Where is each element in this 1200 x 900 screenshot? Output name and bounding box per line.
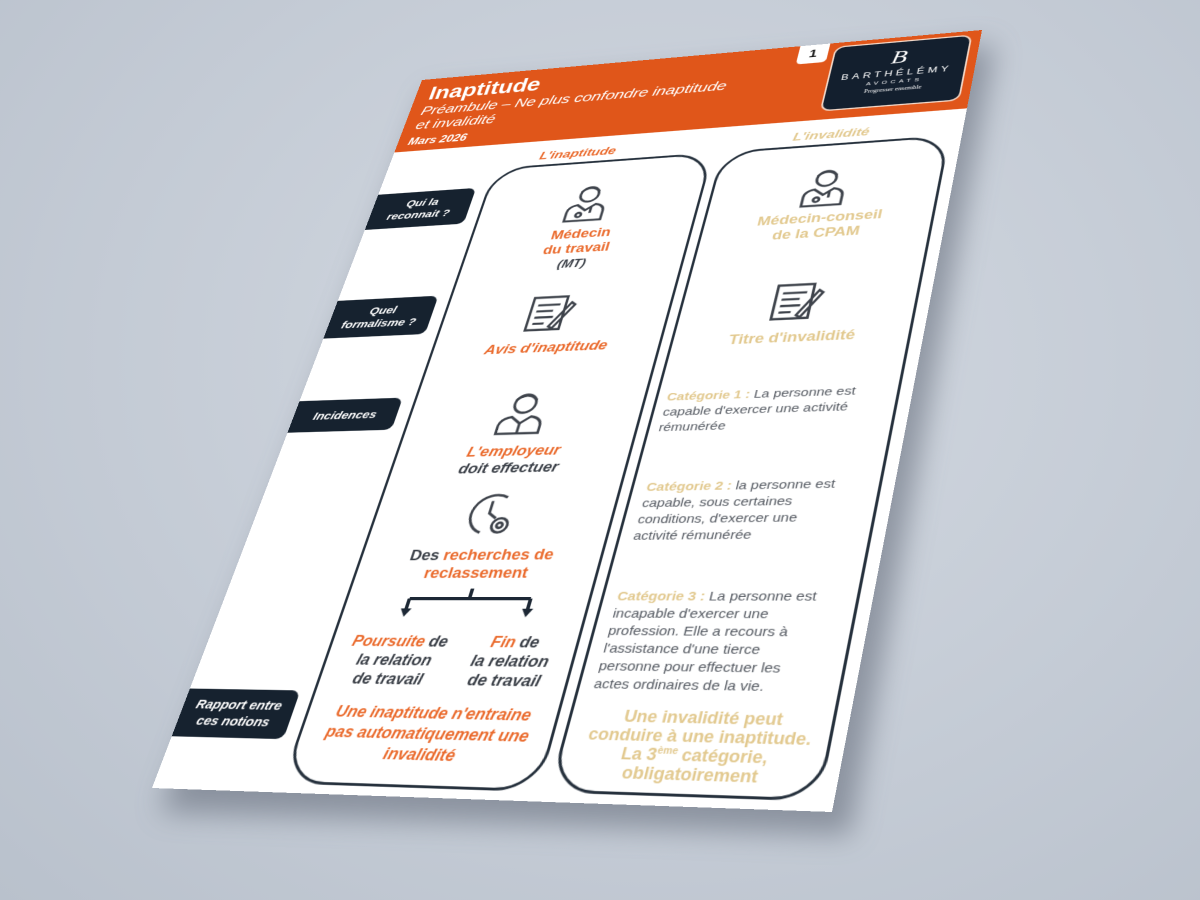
text: rapport inaptitude: invalidité — [381, 745, 458, 765]
panel: inaptitude column — [282, 152, 714, 792]
text: rapport invalidite: La 3ème catégorie, — [619, 744, 770, 767]
label: incidences: Incidences — [311, 408, 379, 422]
column title: inaptitude: L'inaptitude — [538, 144, 618, 162]
text: categorie 3: profession. Elle a recours à — [606, 624, 789, 640]
label: qui la reconnait — [365, 188, 476, 230]
text: fin — [465, 633, 551, 690]
icon: form — [768, 282, 826, 321]
label: quel formalisme: Quel — [368, 304, 398, 317]
text: rapport invalidite: conduire à une inaptitude. — [586, 725, 813, 749]
text: poursuite: Poursuite de — [350, 632, 451, 650]
text: fin: la relation — [469, 652, 551, 670]
text: medecin-conseil: de la CPAM — [771, 223, 861, 242]
text: categorie 3: actes ordinaires de la vie. — [592, 676, 766, 695]
logo: Progresser ensemble — [863, 84, 922, 94]
text: rapport inaptitude: pas automatiquement une — [323, 722, 531, 745]
label: incidences — [287, 398, 403, 433]
text: categorie 2: activité rémunérée — [632, 528, 753, 543]
text: poursuite — [350, 632, 451, 688]
label: rapport: ces notions — [194, 714, 272, 730]
text: categorie 3 — [566, 589, 818, 781]
text: rapport invalidite: obligatoirement — [620, 763, 760, 786]
text: medecin-conseil: Médecin-conseil — [756, 207, 884, 228]
label: qui la reconnait: reconnait ? — [385, 208, 451, 222]
text: medecin du travail: du travail — [541, 240, 612, 257]
text: recherches de reclassement: reclassement — [422, 564, 530, 581]
title: Inaptitude — [426, 74, 544, 104]
text: recherches de reclassement: Des recherches de — [408, 546, 556, 563]
text: categorie 3: incapable d'exercer une — [611, 606, 770, 622]
text: categorie 1: rémunérée — [657, 419, 727, 434]
text: categorie 1 — [657, 384, 857, 434]
logo: B — [889, 46, 910, 68]
text: l'employeur doit effectuer: doit effectuer — [456, 459, 561, 477]
text: rapport inaptitude: Une inaptitude n'entraine — [334, 702, 534, 724]
text: categorie 3: personne pour effectuer les — [597, 659, 782, 676]
icon: employer — [493, 393, 542, 436]
subtitle: Préambule – Ne plus confondre inaptitude — [419, 79, 729, 118]
header band — [394, 30, 982, 152]
text: l'employeur doit effectuer — [456, 442, 562, 477]
text: titre d'invalidite: Titre d'invalidité — [727, 327, 857, 347]
text: categorie 3: Catégorie 3 : La personne est — [616, 589, 818, 604]
text: categorie 2: conditions, d'exercer une — [636, 511, 799, 527]
column title: invalidite: L'invalidité — [792, 125, 871, 143]
text: medecin du travail: (MT) — [556, 258, 587, 271]
text: categorie 3: l'assistance d'une tierce — [602, 641, 762, 658]
text: rapport inaptitude — [322, 702, 534, 765]
panel: invalidite column — [548, 135, 950, 801]
logo: AVOCATS — [865, 76, 923, 87]
icon: doctor — [798, 170, 844, 208]
text: poursuite: la relation — [354, 651, 434, 669]
arrow: split bracket — [400, 588, 534, 618]
label: quel formalisme — [323, 296, 438, 339]
page number tab: 1 — [808, 48, 819, 60]
icon: form — [523, 294, 578, 332]
text: medecin-conseil — [756, 207, 884, 242]
text: medecin du travail: Médecin — [549, 225, 613, 242]
label: qui la reconnait: Qui la — [405, 197, 440, 209]
text: categorie 2: capable, sous certaines — [641, 494, 794, 510]
text: recherches de reclassement — [408, 546, 556, 581]
text: categorie 1: Catégorie 1 : La personne est — [665, 384, 857, 404]
text: avis d'inaptitude: Avis d'inaptitude — [483, 338, 610, 357]
text: rapport invalidite — [566, 707, 813, 786]
text: categorie 1: capable d'exercer une activité — [661, 400, 849, 419]
logo — [820, 35, 973, 112]
icon: doctor — [562, 186, 605, 224]
text: medecin du travail — [541, 225, 613, 271]
text: categorie 2 — [566, 477, 837, 780]
text: rapport invalidite: Une invalidité peut — [622, 707, 785, 729]
text: categorie 2: Catégorie 2 : la personne est — [645, 477, 837, 494]
icon: clock gear — [468, 493, 510, 534]
document page — [152, 30, 982, 812]
logo: BARTHÉLÉMY — [840, 63, 953, 82]
label: rapport: Rapport entre — [194, 697, 284, 713]
text: fin: de travail — [465, 671, 543, 690]
text: l'employeur doit effectuer: L'employeur — [465, 442, 562, 460]
text: poursuite: de travail — [350, 670, 425, 688]
label: rapport — [172, 689, 300, 739]
label: quel formalisme: formalisme ? — [339, 316, 418, 331]
date: Mars 2026 — [406, 133, 468, 147]
text: fin: Fin de — [489, 633, 542, 651]
page number tab — [796, 44, 830, 64]
subtitle: et invalidité — [414, 112, 498, 132]
